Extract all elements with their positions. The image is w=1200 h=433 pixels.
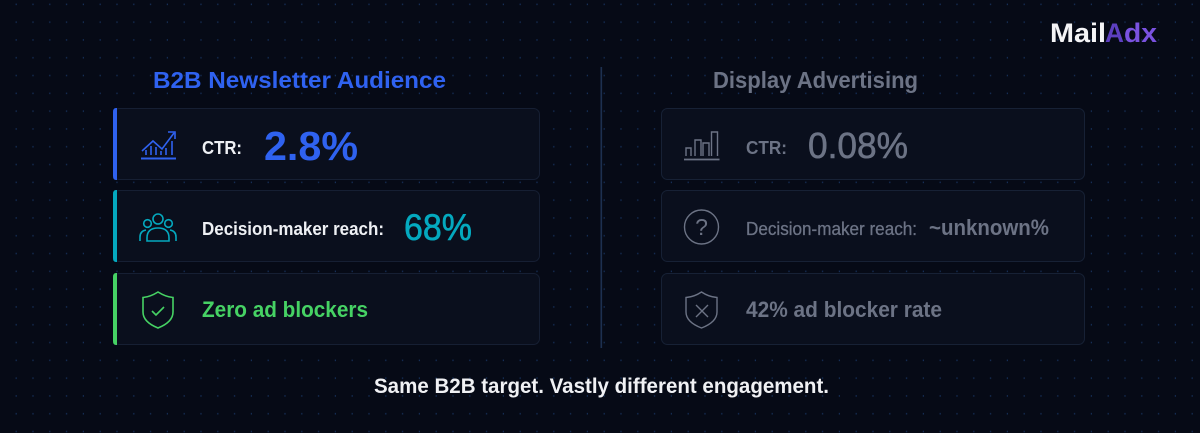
label: CTR: CTR:	[202, 138, 242, 158]
icon: question circle	[684, 210, 718, 244]
icon: group of people	[140, 214, 176, 241]
icon: low bar chart	[684, 132, 720, 160]
logo: MailAdx	[1050, 18, 1157, 48]
icon: rising chart	[141, 132, 176, 158]
center divider	[600, 67, 602, 348]
icon: shield x	[686, 292, 717, 328]
logo: MailAdx: A	[1105, 18, 1124, 48]
panel: display CTR	[662, 108, 1084, 180]
panel: display decision-maker reach	[662, 190, 1084, 262]
label: CTR: CTR:	[746, 138, 787, 158]
icon: question circle: ?	[695, 214, 708, 240]
value: 68%: 68%	[404, 207, 472, 248]
heading: B2B Newsletter Audience: B2B Newsletter Audience	[153, 67, 446, 93]
value: 0.08%: 0.08%	[808, 125, 908, 166]
value: 2.8%: 2.8%	[264, 123, 358, 169]
panel: newsletter CTR	[113, 108, 540, 180]
value: unknown: ~unknown%	[929, 215, 1049, 240]
tagline: Same B2B target. Vastly different engagement.	[374, 375, 829, 398]
panel: newsletter decision-maker reach	[113, 190, 540, 262]
heading: Display Advertising: Display Advertising	[713, 67, 918, 93]
label: decision-maker reach: Decision-maker reach:	[202, 219, 384, 239]
logo: MailAdx: dx	[1124, 18, 1157, 48]
logo: MailAdx: Mail	[1050, 18, 1106, 48]
panel: display ad blocker rate	[662, 274, 1084, 344]
icon: shield check	[143, 292, 173, 328]
text: zero ad blockers: Zero ad blockers	[202, 297, 368, 322]
label: decision-maker reach: Decision-maker reach:	[746, 219, 917, 239]
panel: zero ad blockers	[113, 273, 540, 345]
text: 42% ad blocker rate: 42% ad blocker rate	[746, 297, 942, 322]
